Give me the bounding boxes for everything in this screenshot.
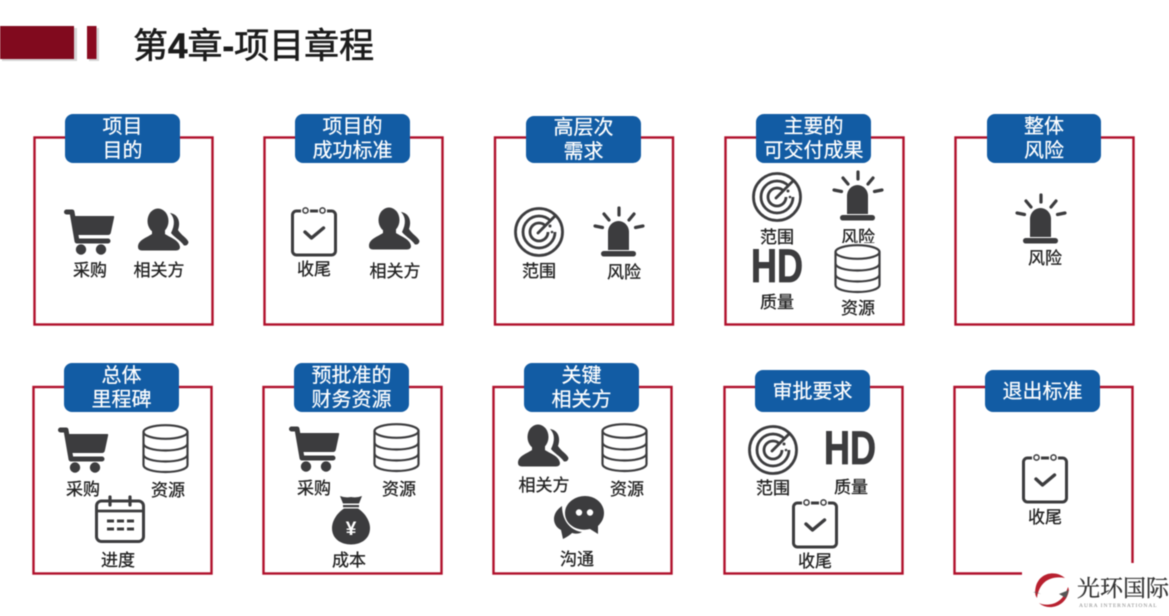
badge: 整体风险 bbox=[987, 114, 1101, 163]
label: 进度: 进度 bbox=[101, 551, 135, 570]
label: 范围: 范围 bbox=[760, 228, 794, 247]
badge: 项目的成功标准: 项目的 bbox=[322, 115, 382, 138]
panel: 总体里程碑 bbox=[34, 363, 212, 574]
label: 资源: 资源 bbox=[841, 299, 875, 318]
logo: 光环国际 bbox=[1033, 573, 1169, 609]
header accent bars bbox=[0, 26, 99, 61]
panel: 主要的可交付成果 bbox=[726, 114, 904, 324]
badge: 预批准的财务资源: 财务资源 bbox=[312, 388, 392, 411]
badge: 关键相关方: 相关方 bbox=[552, 388, 612, 411]
label: 资源: 资源 bbox=[382, 480, 416, 499]
icon: closing calendar bbox=[1024, 455, 1066, 502]
label: 相关方: 相关方 bbox=[370, 262, 420, 281]
badge: 整体风险: 整体 bbox=[1024, 115, 1064, 138]
label: 采购: 采购 bbox=[66, 480, 100, 499]
icon: database bbox=[833, 243, 882, 294]
label: 成本: 成本 bbox=[332, 551, 366, 570]
icon: radar bbox=[754, 174, 800, 220]
icon: money bag bbox=[332, 496, 370, 544]
icon: radar bbox=[750, 426, 796, 474]
icon: stakeholders bbox=[369, 208, 420, 250]
badge: 主要的可交付成果 bbox=[756, 114, 871, 163]
label: 范围: 范围 bbox=[756, 479, 790, 498]
badge: 项目目的: 项目 bbox=[102, 116, 142, 138]
badge: 总体里程碑: 里程碑 bbox=[92, 388, 152, 411]
badge: 项目的成功标准: 成功标准 bbox=[312, 139, 392, 162]
icon: stakeholders bbox=[138, 208, 188, 250]
badge: 项目的成功标准 bbox=[295, 114, 410, 163]
badge: 关键相关方: 关键 bbox=[562, 364, 602, 387]
panel: 预批准的财务资源 bbox=[264, 363, 442, 574]
badge: 高层次需求: 需求 bbox=[564, 140, 604, 163]
badge: 项目目的: 目的 bbox=[102, 139, 142, 162]
badge: 退出标准: 退出标准 bbox=[1002, 380, 1082, 403]
icon: database bbox=[144, 425, 188, 472]
panel: 高层次需求 bbox=[495, 116, 673, 324]
label: 风险: 风险 bbox=[841, 228, 875, 247]
label: 质量: 质量 bbox=[760, 293, 794, 312]
badge: 预批准的财务资源 bbox=[294, 363, 409, 412]
label: 风险: 风险 bbox=[607, 263, 641, 282]
panel: 项目目的 bbox=[34, 114, 212, 324]
label: 资源: 资源 bbox=[610, 480, 644, 499]
icon: cart bbox=[60, 430, 108, 473]
panel: 项目的成功标准 bbox=[264, 114, 442, 324]
label: 相关方: 相关方 bbox=[134, 261, 184, 280]
badge: 审批要求: 审批要求 bbox=[772, 380, 852, 403]
label: 收尾: 收尾 bbox=[1028, 508, 1062, 527]
icon: money bag: ¥ bbox=[346, 519, 357, 540]
icon: stakeholders bbox=[518, 424, 568, 466]
icon: HD quality: HD bbox=[751, 239, 803, 292]
icon: HD quality: HD bbox=[824, 421, 876, 474]
label: 采购: 采购 bbox=[73, 261, 107, 280]
icon: alarm bbox=[595, 208, 643, 256]
badge: 退出标准 bbox=[985, 370, 1100, 412]
label: 沟通: 沟通 bbox=[560, 550, 594, 569]
panel: 关键相关方 bbox=[494, 363, 672, 574]
label: 资源: 资源 bbox=[151, 481, 185, 500]
badge: 项目目的 bbox=[65, 114, 180, 163]
label: 相关方: 相关方 bbox=[518, 476, 570, 495]
icon: cart bbox=[292, 429, 339, 472]
badge: 总体里程碑: 总体 bbox=[102, 364, 142, 387]
icon: cart bbox=[66, 212, 114, 255]
badge: 高层次需求: 高层次 bbox=[554, 116, 614, 139]
icon: chat bbox=[554, 496, 604, 539]
icon: database bbox=[374, 424, 418, 471]
icon: alarm bbox=[1017, 195, 1065, 244]
panel: 退出标准 bbox=[954, 370, 1132, 574]
label: 风险: 风险 bbox=[1028, 249, 1062, 268]
label: 收尾: 收尾 bbox=[798, 552, 832, 571]
panel: 审批要求 bbox=[724, 370, 902, 574]
label: 范围: 范围 bbox=[522, 262, 556, 281]
icon: closing calendar bbox=[794, 500, 836, 547]
label: 收尾: 收尾 bbox=[297, 260, 331, 279]
label: 采购: 采购 bbox=[297, 479, 331, 498]
logo subtitle: AURA INTERNATIONAL bbox=[1079, 603, 1158, 609]
badge: 主要的可交付成果: 主要的 bbox=[784, 115, 844, 138]
icon: schedule calendar bbox=[96, 497, 144, 542]
icon: closing calendar bbox=[292, 208, 336, 255]
badge: 审批要求 bbox=[755, 370, 870, 412]
panel: 整体风险 bbox=[956, 114, 1134, 324]
badge: 关键相关方 bbox=[524, 363, 639, 412]
badge: 高层次需求 bbox=[526, 116, 641, 163]
icon: alarm bbox=[834, 172, 882, 220]
badge: 整体风险: 风险 bbox=[1024, 139, 1064, 162]
title: 第4章-项目章程 bbox=[133, 27, 374, 66]
badge: 总体里程碑 bbox=[64, 363, 179, 412]
icon: database bbox=[602, 424, 646, 471]
logo wordmark: 光环国际 bbox=[1077, 576, 1169, 601]
badge: 预批准的财务资源: 预批准的 bbox=[312, 364, 392, 387]
icon: radar bbox=[516, 208, 562, 256]
label: 质量: 质量 bbox=[834, 478, 868, 497]
badge: 主要的可交付成果: 可交付成果 bbox=[764, 139, 864, 162]
